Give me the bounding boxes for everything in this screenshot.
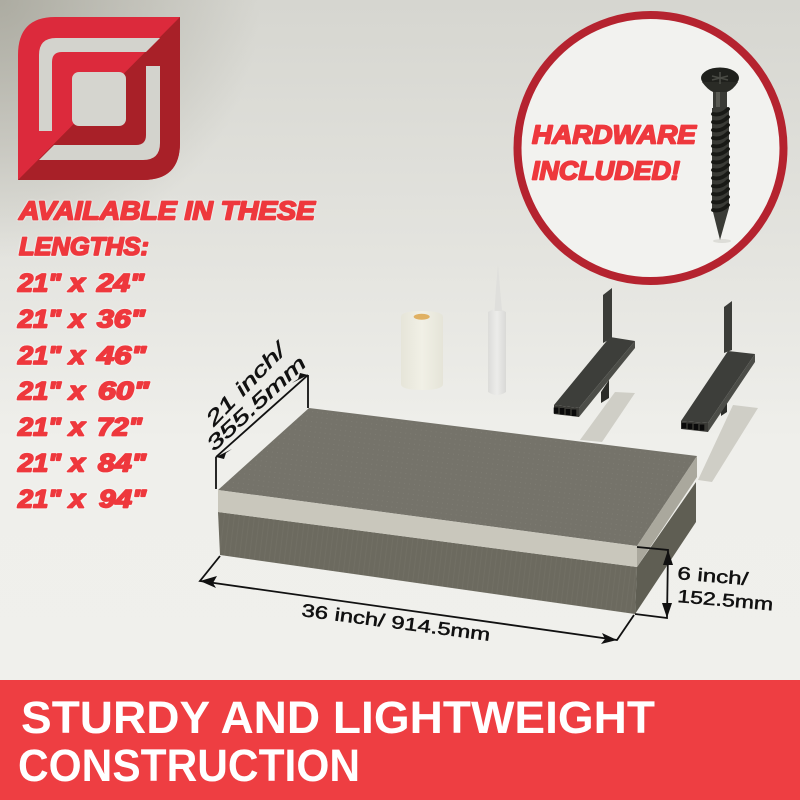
- dimension: height 6 inch: [635, 547, 774, 618]
- banner: [0, 680, 800, 800]
- logo: [18, 17, 180, 180]
- heading: available lengths: LENGTHS:: [19, 233, 149, 261]
- list: available sizes: 84": [98, 450, 147, 478]
- list: available sizes: x: [67, 306, 86, 334]
- icon: screw: [701, 68, 739, 243]
- list: available sizes: 60": [98, 378, 150, 406]
- sealant tube: [488, 264, 506, 395]
- heading: available lengths: [18, 196, 316, 261]
- heading: available lengths: AVAILABLE IN THESE: [18, 196, 316, 226]
- list: available sizes: 21": [17, 486, 62, 514]
- list: available sizes: 72": [97, 414, 143, 442]
- callout text: HARDWARE: [532, 120, 697, 150]
- callout text: INCLUDED!: [532, 156, 680, 186]
- list: available sizes: 21": [17, 306, 62, 334]
- dimension: height 6 inch: 6 inch/: [677, 563, 749, 589]
- list: available sizes: 36": [97, 306, 146, 334]
- list: available sizes: 21": [17, 450, 62, 478]
- dimension: length 36 inch: 36 inch/ 914.5mm: [300, 600, 491, 645]
- list: available sizes: 21": [17, 270, 62, 298]
- banner heading: CONSTRUCTION: [18, 740, 360, 791]
- list: available sizes: [17, 270, 150, 514]
- list: available sizes: x: [67, 270, 86, 298]
- list: available sizes: 46": [96, 342, 147, 370]
- list: available sizes: 24": [96, 270, 145, 298]
- list: available sizes: 21": [17, 342, 62, 370]
- dimension: height 6 inch: 152.5mm: [677, 586, 774, 614]
- dimension: length 36 inch: [200, 556, 634, 645]
- bracket 1: [554, 288, 635, 442]
- tape roll: [401, 311, 443, 390]
- dimension: width 21 inch: [201, 337, 311, 489]
- banner heading: [18, 692, 655, 791]
- dimension: width 21 inch: 21 inch/: [201, 337, 293, 432]
- list: available sizes: 21": [17, 414, 62, 442]
- list: available sizes: x: [67, 414, 86, 442]
- list: available sizes: 21": [17, 378, 62, 406]
- list: available sizes: x: [67, 378, 86, 406]
- dimension: width 21 inch: 355.5mm: [202, 352, 311, 456]
- bracket 2: [681, 301, 758, 482]
- banner heading: STURDY AND LIGHTWEIGHT: [21, 692, 655, 743]
- callout text: [532, 120, 697, 186]
- list: available sizes: x: [67, 342, 86, 370]
- list: available sizes: x: [67, 486, 86, 514]
- callout: hardware included: [518, 15, 784, 281]
- shelf block: [218, 408, 697, 614]
- list: available sizes: x: [67, 450, 86, 478]
- list: available sizes: 94": [99, 486, 147, 514]
